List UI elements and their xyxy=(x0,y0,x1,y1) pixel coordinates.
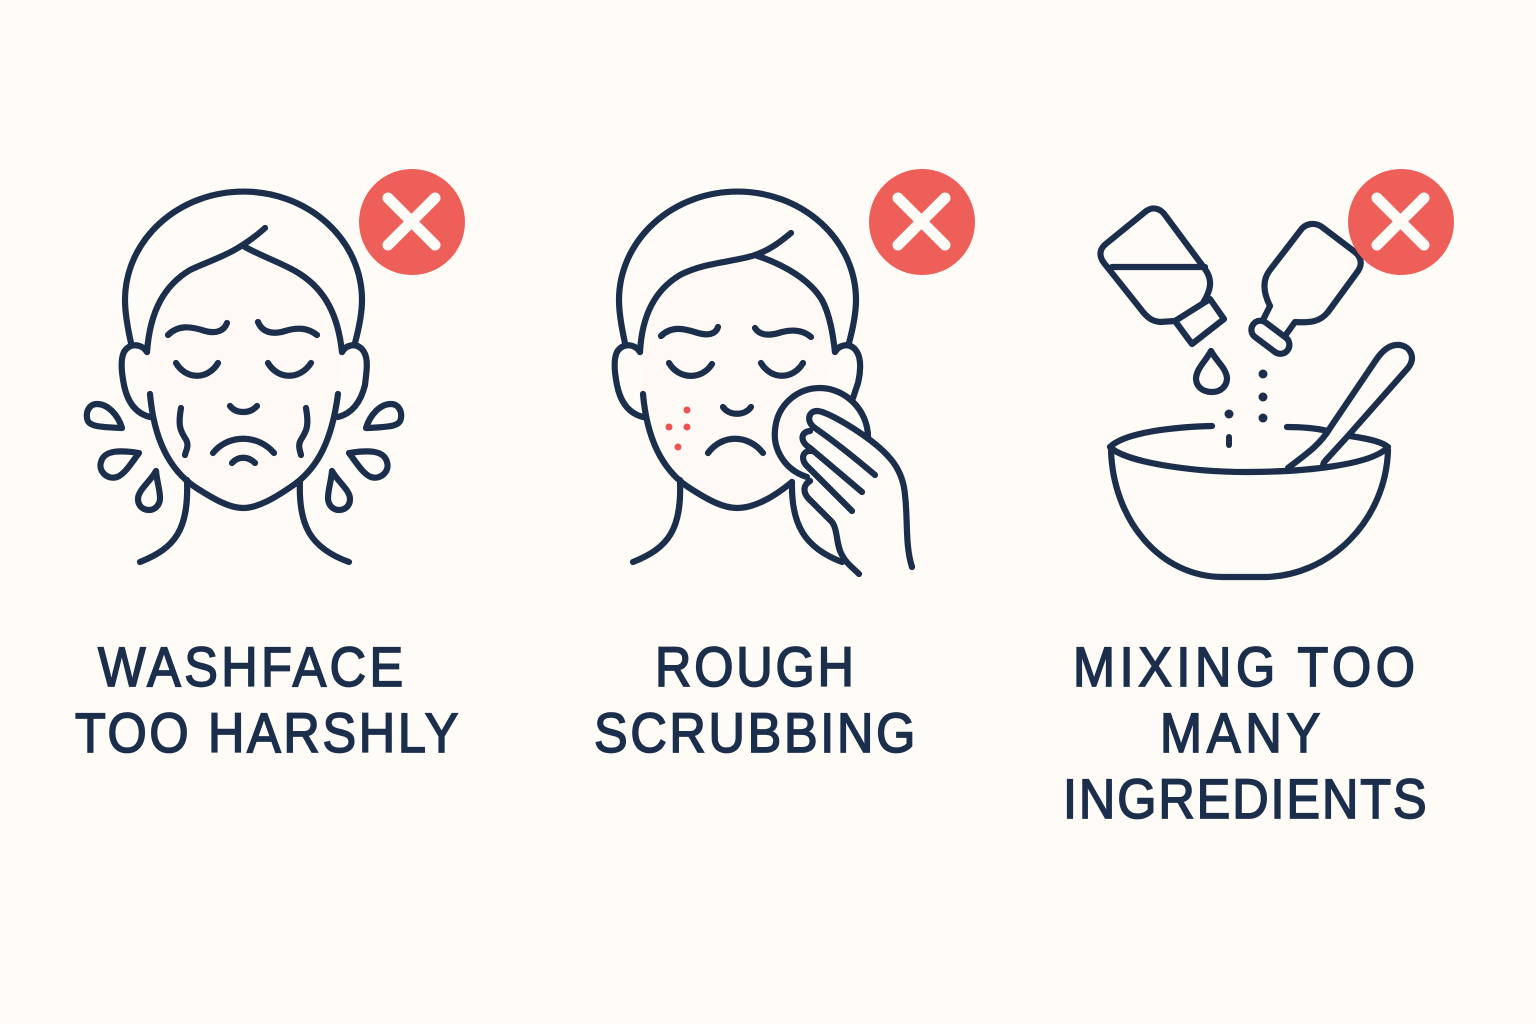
icon: irritated face with droplets xyxy=(87,192,401,562)
label: rough scrubbing xyxy=(594,637,915,765)
label: washface too harshly xyxy=(75,637,458,765)
label: mixing too many ingredients: INGREDIENTS xyxy=(1063,769,1427,831)
label: rough scrubbing: SCRUBBING xyxy=(594,703,915,765)
label: washface too harshly: TOO HARSHLY xyxy=(75,703,458,765)
icon: red X badge xyxy=(869,169,975,275)
label: rough scrubbing: ROUGH xyxy=(655,637,854,699)
icon: red X badge xyxy=(1348,169,1454,275)
label: mixing too many ingredients xyxy=(1063,637,1427,831)
icon: face with acne and hand scrubbing with pad xyxy=(615,192,912,574)
icon: red X badge xyxy=(359,169,465,275)
icon: red acne dots xyxy=(666,406,690,450)
panel: washing face too harshly xyxy=(75,169,465,765)
icon: two bottles pouring into bowl with spoon xyxy=(1100,208,1412,577)
icon: falling droplet dots xyxy=(1224,370,1268,422)
panel: mixing too many ingredients xyxy=(1063,169,1454,831)
label: washface too harshly: WASHFACE xyxy=(98,637,403,699)
label: mixing too many ingredients: MIXING TOO xyxy=(1073,637,1415,699)
panel: rough scrubbing xyxy=(594,169,975,765)
label: mixing too many ingredients: MANY xyxy=(1160,703,1320,765)
